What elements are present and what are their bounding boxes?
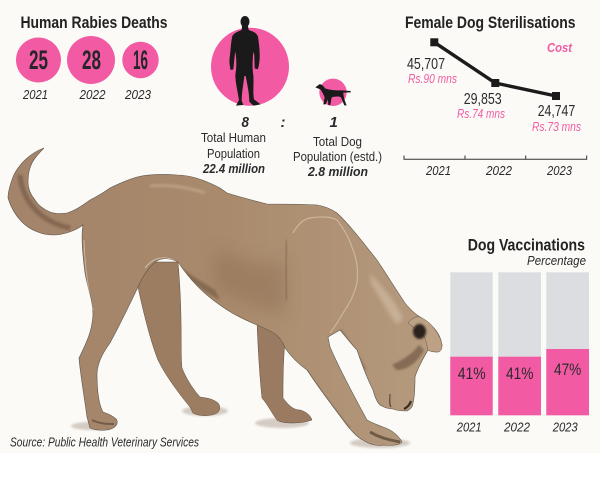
ratio eight: 8 [242, 114, 250, 131]
bar year labels: 2021 [456, 421, 482, 435]
bubble 2021 [16, 38, 61, 82]
subheading: percentage: Percentage [527, 254, 586, 268]
bubble 2023 [122, 42, 159, 78]
bar 2021 [450, 272, 493, 415]
far front leg [257, 322, 312, 423]
legend: cost: Cost [547, 40, 573, 55]
bar year labels: 2023 [552, 421, 578, 435]
bar 2023: 47% [554, 361, 582, 379]
human population label: Total Human [201, 130, 266, 145]
values 2021: Rs.90 mns [408, 72, 457, 86]
panel: female dog sterilisations [404, 14, 587, 178]
ground shadows [71, 406, 410, 448]
far hind leg [138, 262, 220, 416]
dog population circle [319, 79, 347, 106]
axis year labels: 2022 [485, 164, 512, 178]
values 2021 [407, 56, 457, 86]
illustration: dog [8, 148, 442, 448]
icon: dog silhouette [315, 84, 351, 105]
values 2022: Rs.74 mns [457, 107, 505, 121]
year labels: 2022 [79, 88, 106, 102]
human population circle [211, 28, 289, 106]
dog population label: Total Dog [313, 134, 362, 149]
dog shading and fur detail [20, 160, 424, 442]
human population label: Population [207, 146, 260, 161]
bubble 2022 [67, 36, 115, 84]
panel: human rabies deaths [16, 14, 168, 102]
ratio one: 1 [330, 114, 338, 131]
values 2023 [532, 103, 581, 134]
bar 2023 [546, 272, 589, 415]
year labels [22, 88, 151, 102]
year labels: 2021 [22, 88, 48, 102]
year labels: 2023 [124, 88, 151, 102]
bubble 2021: 25 [29, 45, 48, 75]
icon: human silhouette [229, 16, 261, 106]
axis year labels [425, 164, 572, 178]
dog ear [408, 317, 442, 352]
bar year labels: 2022 [503, 421, 530, 435]
bar 2022 [498, 272, 541, 415]
values 2022 [457, 91, 505, 121]
axis year labels: 2023 [546, 164, 572, 178]
dog population label: 2.8 million [307, 164, 368, 179]
bar year labels [456, 421, 578, 435]
values 2023: 24,747 [538, 103, 575, 120]
panel: dog vaccinations [450, 237, 589, 435]
bar 2022: 41% [506, 365, 534, 383]
values 2021: 45,707 [407, 56, 445, 73]
ratio colon: : [280, 114, 286, 131]
human population label [201, 130, 266, 176]
values 2023: Rs.73 mns [532, 120, 581, 134]
dog population label: Population (estd.) [293, 149, 382, 164]
source note: Source: Public Health Veterinary Services [10, 436, 199, 450]
axis year labels: 2021 [425, 164, 451, 178]
line chart [430, 38, 560, 100]
time axis [404, 156, 587, 159]
values 2022: 29,853 [464, 91, 502, 108]
bubble 2023: 16 [133, 45, 148, 75]
dog population label [293, 134, 382, 179]
bar 2021: 41% [458, 365, 486, 383]
human population label: 22.4 million [202, 161, 265, 176]
panel: population ratio [201, 16, 382, 179]
dog body [8, 148, 442, 445]
bubble 2022: 28 [82, 45, 101, 75]
heading: human rabies deaths: Human Rabies Deaths [20, 14, 168, 32]
